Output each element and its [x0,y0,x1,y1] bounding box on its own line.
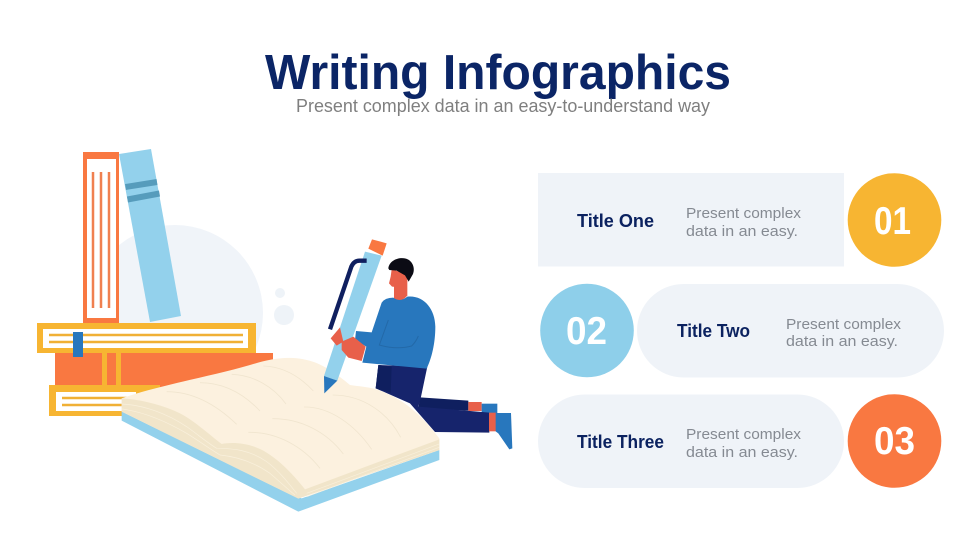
panel: title one [538,173,844,266]
number 02 [540,284,634,377]
middle orange book [55,353,273,392]
number 01 [848,173,941,267]
heading: Title One [577,211,654,231]
title: Writing Infographics [265,46,731,100]
neck and head [394,277,407,301]
number 03: 03 [874,420,915,463]
person [355,258,512,449]
number 01: 01 [874,200,911,243]
hands [331,327,366,361]
text block [786,316,902,350]
leaning blue book [119,149,181,322]
bookmark [73,332,83,357]
text block: Present complex [686,426,802,443]
text block: Present complex [686,205,802,222]
open book [122,358,439,512]
trousers [376,365,489,433]
text block: data in an easy. [686,223,798,240]
small bubbles [274,288,294,325]
text block: Present complex [786,316,902,333]
text block: data in an easy. [686,444,798,461]
text block [686,205,802,240]
pen [324,239,387,393]
panel: title three [538,394,844,488]
background circle [87,225,263,401]
top yellow book [37,323,256,353]
text block [686,426,802,461]
illustration: books and writer [37,149,512,512]
number 03 [848,394,941,488]
page lines [167,366,401,468]
subtitle: Present complex data in an easy-to-understand way [296,96,710,116]
pen and hands [324,239,387,393]
number 02: 02 [566,310,607,353]
front foot [489,413,496,431]
text block: data in an easy. [786,333,898,350]
page edges [122,398,439,499]
heading: Title Two [677,321,750,341]
back leg [418,397,468,411]
bottom yellow book [49,385,160,416]
upright orange book [83,152,119,323]
sweater [355,297,435,369]
heading: Title Three [577,432,664,452]
panel: title two [637,284,944,378]
